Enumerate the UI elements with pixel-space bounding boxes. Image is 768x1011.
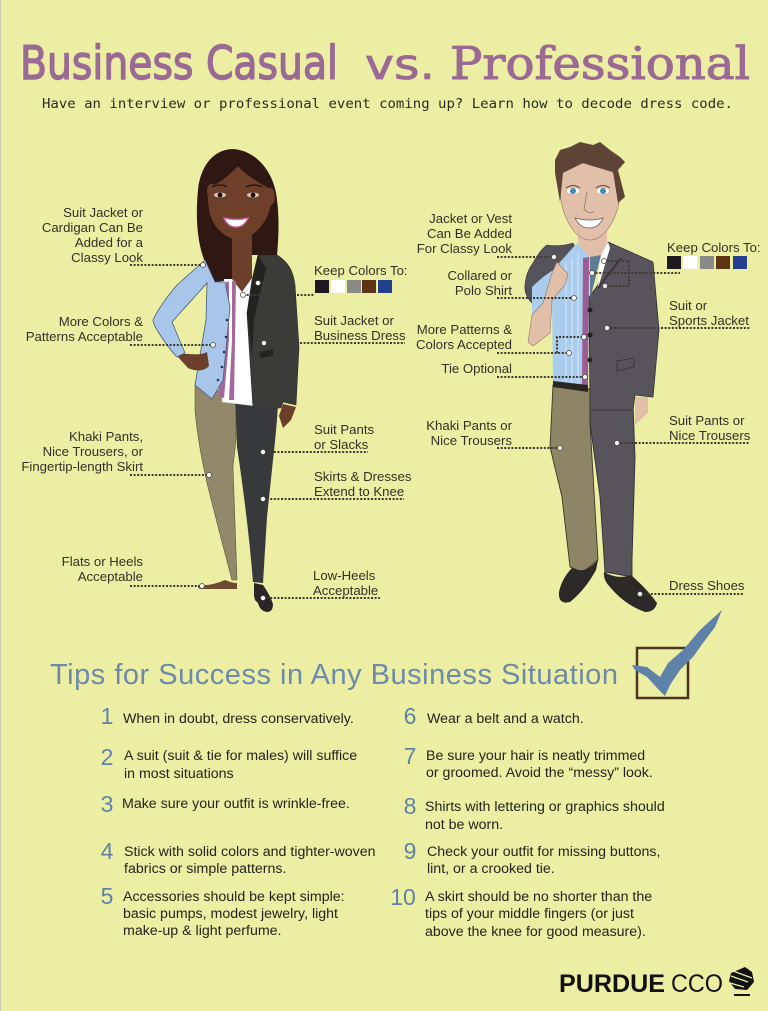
- callout: khaki pants: Khaki Pants,: [69, 429, 143, 444]
- callout: more colors: More Colors &: [59, 314, 143, 329]
- mouth: [224, 218, 248, 227]
- title: Business Casual: [20, 36, 338, 90]
- shirt: [532, 243, 590, 387]
- tips list: [101, 703, 665, 940]
- tip 4: fabrics or simple patterns.: [124, 861, 286, 877]
- callout: suit jacket or cardigan: Classy Look: [71, 250, 143, 265]
- callout: dress shoes: Dress Shoes: [669, 578, 745, 593]
- callout: suit pants: [260, 422, 375, 454]
- tie blue: [590, 255, 601, 300]
- callout: skirts: [260, 469, 412, 502]
- callout: tie optional: [441, 361, 588, 380]
- callout: jacket or vest: For Classy Look: [417, 241, 512, 256]
- icon: checkmark: [632, 610, 722, 698]
- tip 2: 2: [101, 744, 113, 770]
- tip 2: in most situations: [124, 766, 234, 782]
- arm: [528, 262, 568, 346]
- callout: khaki trousers: [426, 418, 562, 450]
- tip 9: lint, or a crooked tie.: [427, 861, 555, 877]
- figure: man: [525, 142, 659, 612]
- tip 10: [390, 884, 652, 940]
- shirt: [222, 278, 254, 406]
- tip 9: [404, 838, 660, 877]
- tip 3: Make sure your outfit is wrinkle-free.: [122, 796, 350, 812]
- tip 5: [101, 883, 345, 939]
- right hand: [635, 397, 648, 425]
- callout: suit pants: or Slacks: [314, 437, 369, 452]
- callout: suit jacket or cardigan: [42, 205, 206, 268]
- tip 5: 5: [101, 883, 113, 909]
- pocket: [617, 358, 634, 371]
- tip 10: A skirt should be no shorter than the: [425, 889, 652, 905]
- callout: suit jacket or cardigan: Suit Jacket or: [63, 205, 144, 220]
- callout: khaki pants: Nice Trousers, or: [43, 444, 144, 459]
- tip 1: When in doubt, dress conservatively.: [123, 711, 354, 727]
- belt: [553, 381, 588, 392]
- tip 9: 9: [404, 838, 416, 864]
- callout: jacket or vest: Can Be Added: [427, 226, 512, 241]
- jacket pocket: [260, 349, 273, 358]
- callout: skirts: Skirts & Dresses: [314, 469, 412, 484]
- title: vs.: [365, 40, 435, 89]
- callout: more colors: [26, 314, 216, 348]
- callout: khaki trousers: Nice Trousers: [431, 433, 512, 448]
- logo: CCO: [671, 970, 723, 998]
- shirt collar: [598, 242, 610, 288]
- tip 6: Wear a belt and a watch.: [427, 711, 584, 727]
- tip 3: [101, 791, 350, 817]
- tip 8: not be worn.: [425, 817, 503, 833]
- callout: khaki pants: [21, 429, 212, 478]
- logo: PURDUE: [559, 970, 665, 998]
- callout: suit pants man: [614, 413, 751, 446]
- cardigan buttons: [217, 319, 228, 381]
- callout: low heels: Low-Heels: [313, 568, 376, 583]
- callout: flats: Flats or Heels: [62, 554, 143, 569]
- callout: flats: Acceptable: [78, 569, 143, 584]
- callout: collared: Polo Shirt: [455, 283, 512, 298]
- tip 8: 8: [404, 793, 416, 819]
- callout: more patterns: [416, 322, 586, 356]
- callout: more patterns: Colors Accepted: [416, 337, 512, 352]
- khaki pants: [195, 385, 237, 580]
- dark pants: [235, 395, 279, 583]
- tip 5: make-up & light perfume.: [123, 923, 282, 939]
- logo: [559, 967, 754, 998]
- tip 6: 6: [404, 703, 416, 729]
- tip 10: tips of your middle fingers (or just: [425, 906, 634, 922]
- callout: skirts: Extend to Knee: [314, 484, 404, 499]
- khaki trousers: [550, 385, 598, 572]
- callout: keep colors man: [590, 240, 761, 288]
- callout: jacket or vest: [417, 211, 556, 260]
- buttons: [588, 308, 592, 362]
- hair: [555, 142, 625, 203]
- callout: keep colors woman: Keep Colors To:: [314, 263, 408, 278]
- tip 7: [404, 743, 653, 781]
- tip 4: 4: [101, 838, 114, 864]
- title: Professional: [450, 37, 750, 90]
- tip 3: 3: [101, 791, 113, 817]
- callout: collared: Collared or: [447, 268, 513, 283]
- callout: flats: [62, 554, 204, 588]
- tip 8: [404, 793, 665, 833]
- tip 1: 1: [101, 703, 113, 729]
- shirt stripes: [566, 252, 578, 385]
- jacket: [247, 255, 299, 408]
- callout: suit pants man: Nice Trousers: [669, 428, 751, 443]
- tip 6: [404, 703, 584, 729]
- right shoe: [604, 572, 657, 612]
- face: [560, 163, 620, 240]
- callout: jacket or vest: Jacket or Vest: [429, 211, 512, 226]
- draped jacket: [525, 243, 576, 303]
- tip 7: Be sure your hair is neatly trimmed: [426, 748, 645, 764]
- callout: suit jacket or cardigan: Cardigan Can Be: [42, 220, 143, 235]
- callout: khaki trousers: Khaki Pants or: [426, 418, 513, 433]
- callout: collared: [447, 268, 576, 300]
- tip 10: 10: [390, 884, 416, 910]
- callout: low heels: Acceptable: [313, 583, 378, 598]
- callout: more colors: Patterns Acceptable: [26, 329, 143, 344]
- right hand: [279, 404, 296, 428]
- nose: [584, 192, 594, 213]
- callout: more patterns: More Patterns &: [417, 322, 512, 337]
- callout: khaki pants: Fingertip-length Skirt: [21, 459, 143, 474]
- callout: keep colors man: Keep Colors To:: [667, 240, 761, 255]
- tip 9: Check your outfit for missing buttons,: [427, 844, 660, 860]
- tip 7: or groomed. Avoid the “messy” look.: [426, 765, 653, 781]
- mouth: [575, 218, 603, 228]
- face: [207, 166, 275, 239]
- callout: suit jacket or dress: [262, 313, 406, 346]
- hair back: [197, 149, 278, 282]
- heading: tips: Tips for Success in Any Business Situation: [50, 659, 618, 691]
- callout: suit jacket or cardigan: Added for a: [75, 235, 144, 250]
- left hand: [178, 352, 209, 370]
- left shoe: [559, 560, 598, 603]
- callout: dress shoes: [638, 578, 745, 596]
- figure: woman: [153, 149, 299, 612]
- tip 2: A suit (suit & tie for males) will suffice: [124, 748, 357, 764]
- neck: [578, 225, 607, 262]
- callout: sports jacket: Suit or: [669, 298, 708, 313]
- callout: suit jacket or dress: Suit Jacket or: [314, 313, 394, 328]
- callout: tie optional: Tie Optional: [441, 361, 512, 376]
- callout: sports jacket: Sports Jacket: [669, 313, 749, 328]
- callout: keep colors woman: [240, 263, 408, 298]
- gray trousers: [590, 405, 635, 577]
- icon: globe: [729, 967, 754, 995]
- subtitle: Have an interview or professional event coming up? Learn how to decode dress code.: [42, 96, 733, 112]
- flat shoe: [198, 580, 237, 589]
- title: [20, 36, 750, 90]
- tip 1: [101, 703, 354, 729]
- tip 7: 7: [404, 743, 416, 769]
- callout: suit jacket or dress: Business Dress: [314, 328, 406, 343]
- neck: [232, 232, 252, 292]
- tip 8: Shirts with lettering or graphics should: [425, 799, 665, 815]
- tip 10: above the knee for good measure).: [425, 924, 646, 940]
- callout: low heels: [260, 568, 380, 600]
- tip 2: [101, 744, 357, 782]
- eyes: [566, 186, 610, 194]
- tip 5: Accessories should be kept simple:: [123, 889, 345, 905]
- callout: suit pants: Suit Pants: [314, 422, 375, 437]
- eyes: [212, 185, 262, 197]
- callout: sports jacket: [604, 298, 751, 330]
- tie purple: [582, 257, 589, 387]
- tip 5: basic pumps, modest jewelry, light: [123, 906, 338, 922]
- lapel: [598, 258, 621, 288]
- heel shoe: [254, 583, 273, 612]
- suit jacket: [589, 242, 659, 410]
- tip 4: [101, 838, 376, 877]
- cardigan: [153, 260, 230, 399]
- tip 4: Stick with solid colors and tighter-woven: [124, 844, 376, 860]
- callout: suit pants man: Suit Pants or: [669, 413, 745, 428]
